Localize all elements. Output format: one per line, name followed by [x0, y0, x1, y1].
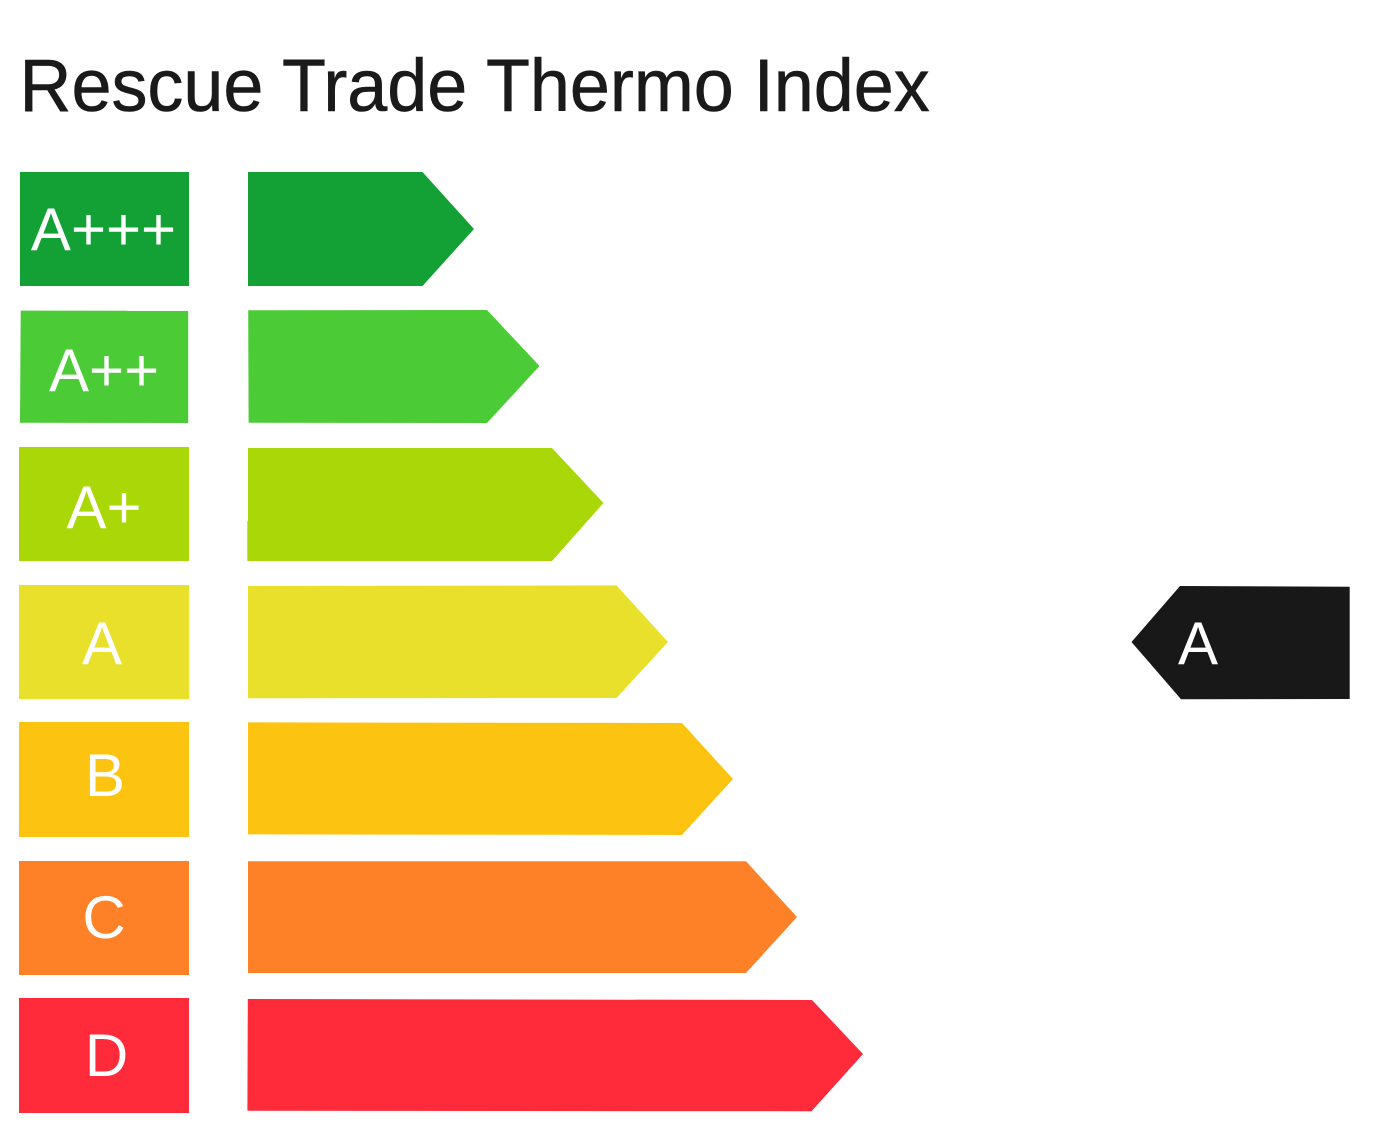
arrow: D — [247, 999, 863, 1111]
label: A++: A++ — [49, 337, 159, 404]
label: A++ — [20, 311, 188, 423]
arrow: C — [248, 861, 797, 973]
label: A — [19, 585, 189, 699]
label: B: B — [85, 742, 125, 809]
arrow: A+++ — [248, 172, 474, 286]
label: A+++: A+++ — [31, 196, 176, 263]
arrow: A++ — [248, 310, 539, 423]
label: B — [19, 722, 189, 837]
title: Rescue Trade Thermo Index — [20, 45, 930, 127]
arrow: B — [248, 722, 733, 835]
label: C — [19, 861, 189, 975]
arrow: A — [248, 585, 668, 698]
arrow: A+ — [247, 448, 604, 561]
label: A: A — [82, 610, 122, 677]
rating marker: A — [1132, 586, 1350, 699]
label: D: D — [85, 1022, 128, 1089]
label: D — [19, 998, 189, 1113]
label: A+++ — [20, 172, 189, 286]
label: A+: A+ — [66, 474, 142, 541]
rating marker: A: A — [1178, 610, 1218, 677]
label: C: C — [82, 884, 126, 951]
label: A+ — [19, 447, 189, 561]
